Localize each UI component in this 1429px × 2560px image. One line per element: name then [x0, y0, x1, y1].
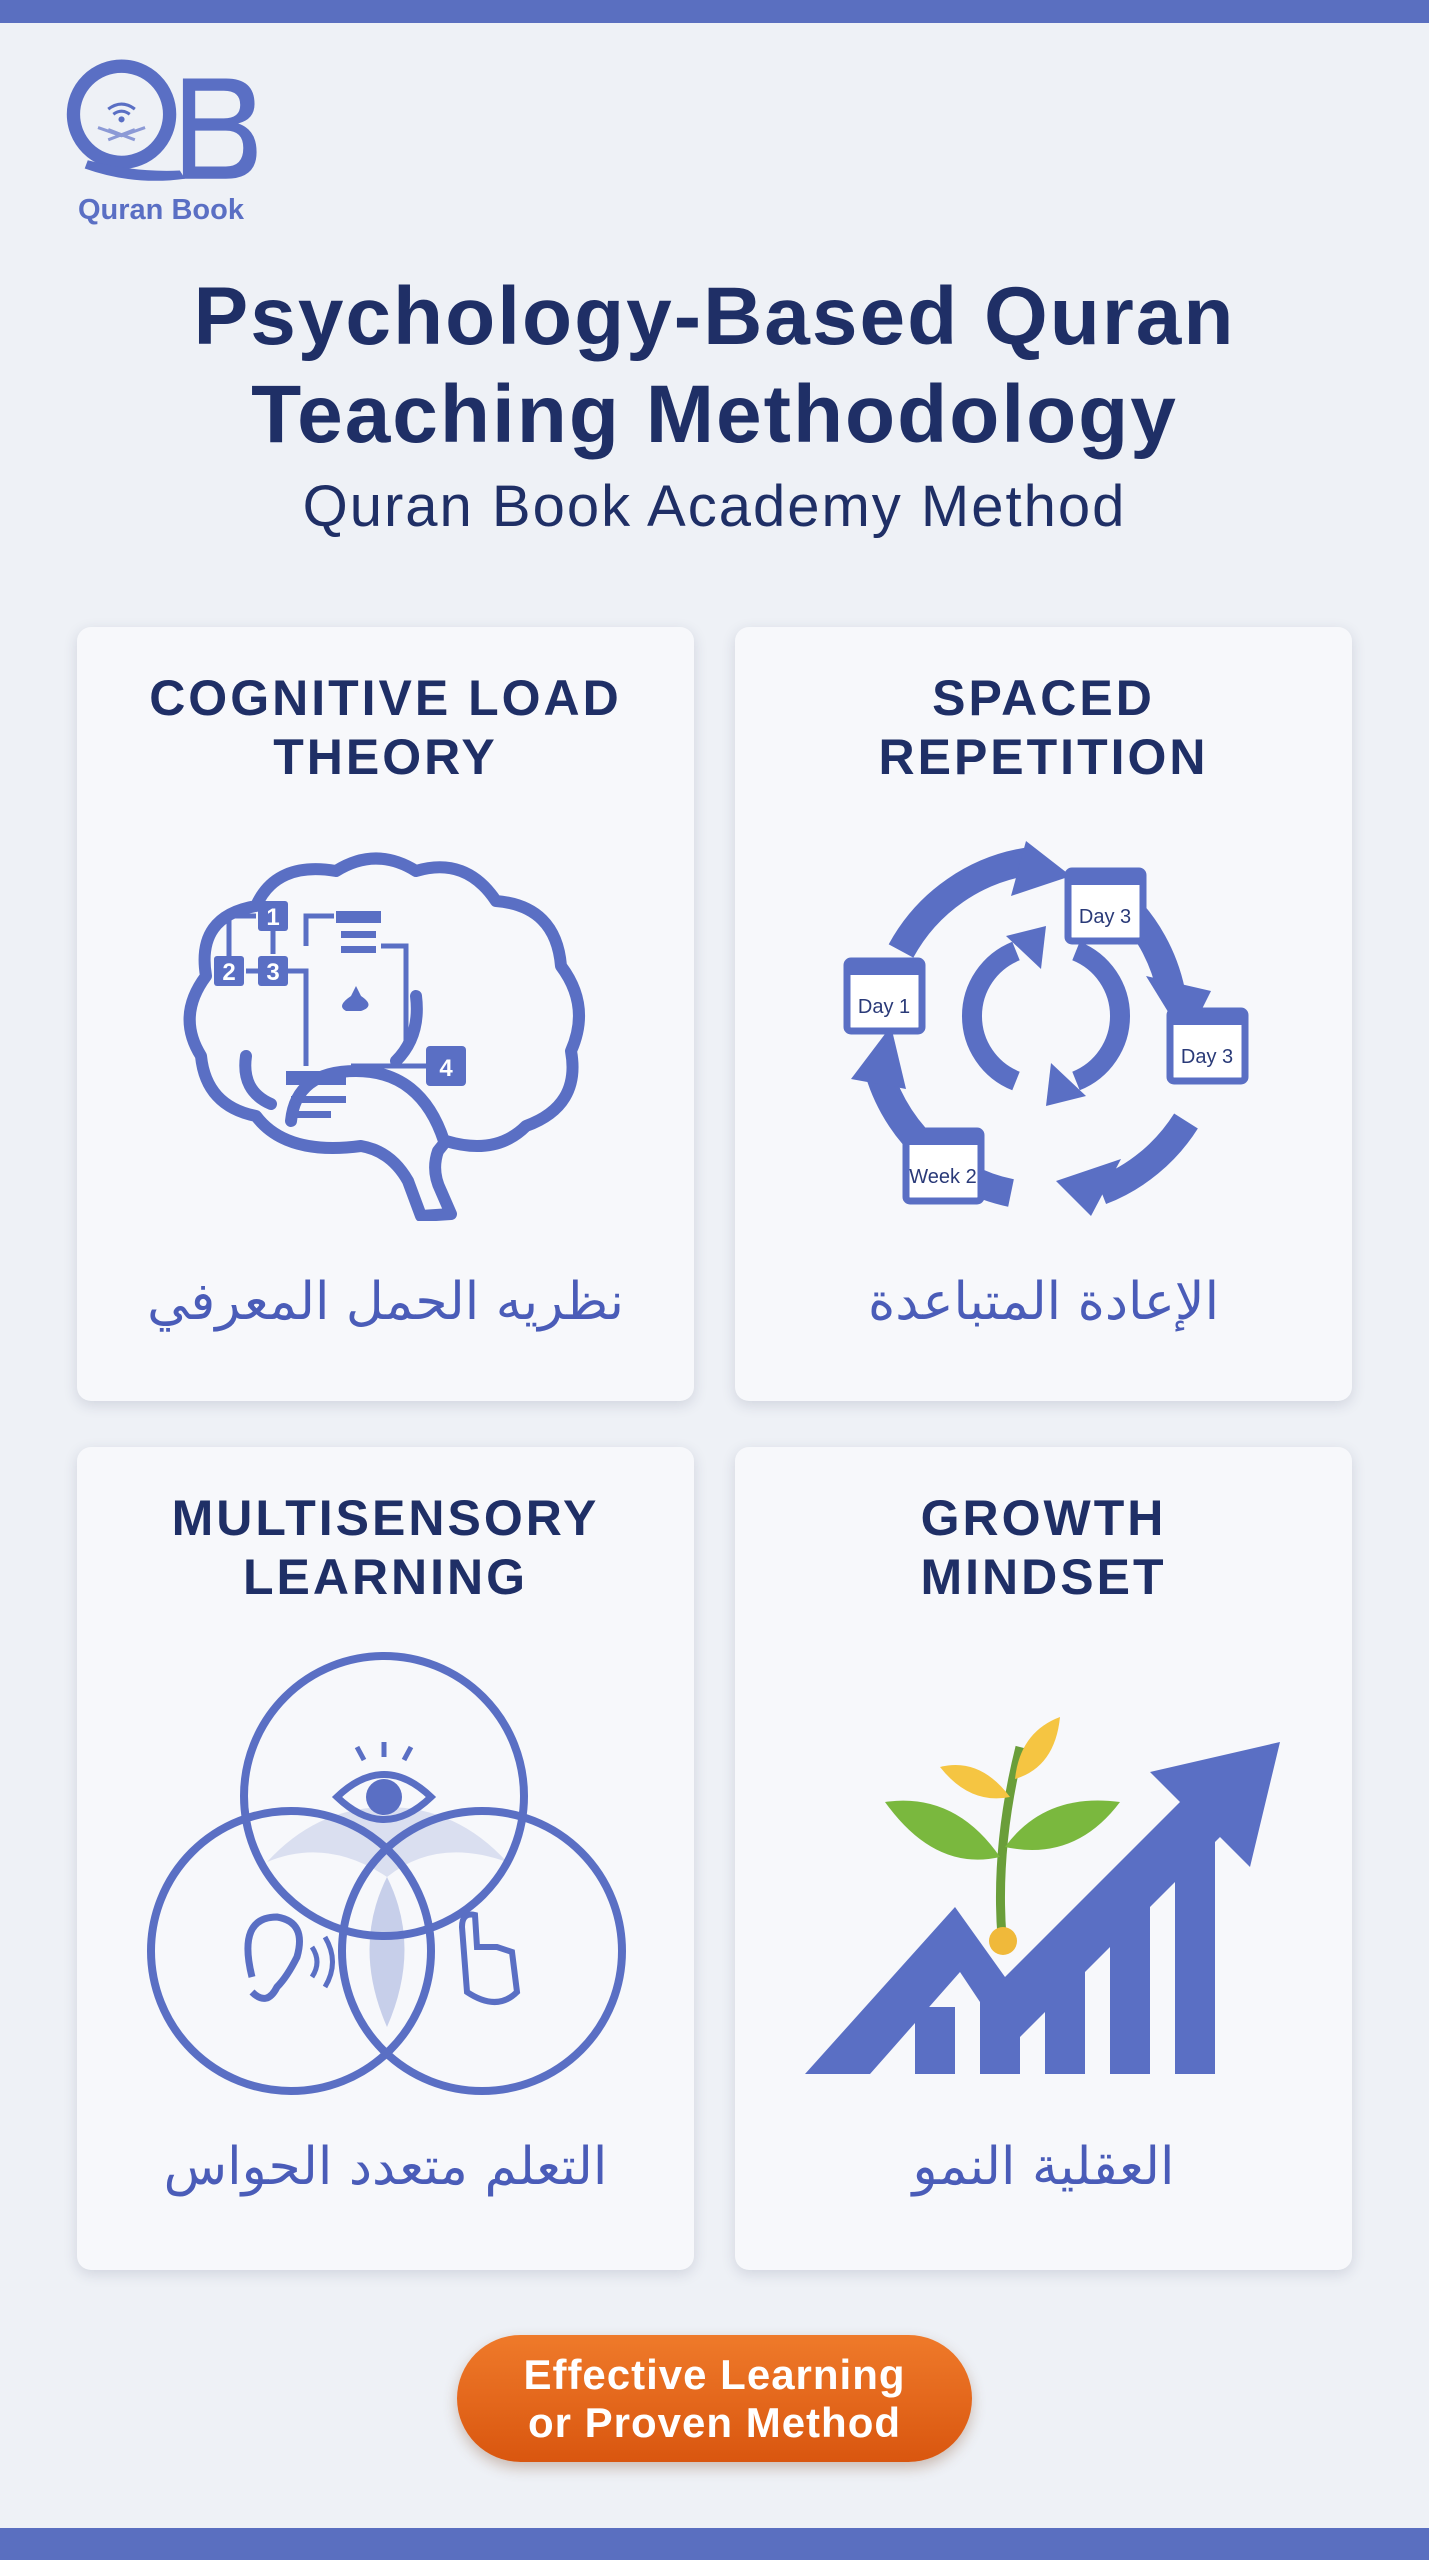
heading: REPETITION	[878, 729, 1209, 785]
icon: venn senses	[147, 1652, 626, 2095]
icon: brain: 4	[439, 1055, 453, 1082]
logo: Quran Book	[78, 194, 244, 226]
callout button: or Proven Method	[528, 2399, 901, 2446]
heading	[878, 670, 1209, 785]
heading: GROWTH	[921, 1490, 1166, 1546]
title: Psychology-Based Quran	[194, 271, 1235, 362]
icon: cycle with calendars	[844, 841, 1248, 1216]
icon: cycle with calendars: Day 3	[1181, 1046, 1233, 1068]
callout button	[457, 2335, 972, 2462]
subtitle: Quran Book Academy Method	[303, 474, 1126, 539]
title	[194, 271, 1235, 460]
arabic label: الإعادة المتباعدة	[868, 1272, 1219, 1332]
icon: cycle with calendars: Day 1	[858, 996, 910, 1018]
icon: cycle with calendars: Day 3	[1079, 906, 1131, 928]
panel: growth mindset	[735, 1447, 1352, 2270]
callout button: Effective Learning	[523, 2351, 906, 2398]
title: Teaching Methodology	[251, 369, 1178, 460]
logo	[66, 60, 257, 226]
arabic label: التعلم متعدد الحواس	[164, 2137, 607, 2197]
heading	[149, 670, 622, 785]
icon: brain: 1	[266, 904, 280, 931]
arabic label: العقلية النمو	[913, 2137, 1174, 2197]
icon: brain: 3	[266, 959, 280, 986]
heading: SPACED	[932, 670, 1155, 726]
panel: multisensory	[77, 1447, 694, 2270]
heading: MULTISENSORY	[172, 1490, 599, 1546]
icon: cycle with calendars: Week 2	[909, 1166, 977, 1188]
icon: brain: 2	[222, 959, 236, 986]
heading	[920, 1490, 1166, 1605]
heading	[172, 1490, 599, 1605]
heading: LEARNING	[243, 1549, 528, 1605]
heading: THEORY	[273, 729, 498, 785]
heading: COGNITIVE LOAD	[149, 670, 622, 726]
panel: spaced repetition	[735, 627, 1352, 1401]
heading: MINDSET	[920, 1549, 1166, 1605]
icon: growth arrow with plant	[805, 1717, 1280, 2074]
icon: brain	[184, 852, 586, 1221]
arabic label: نظريه الحمل المعرفي	[147, 1272, 624, 1332]
panel: cognitive load	[77, 627, 694, 1401]
